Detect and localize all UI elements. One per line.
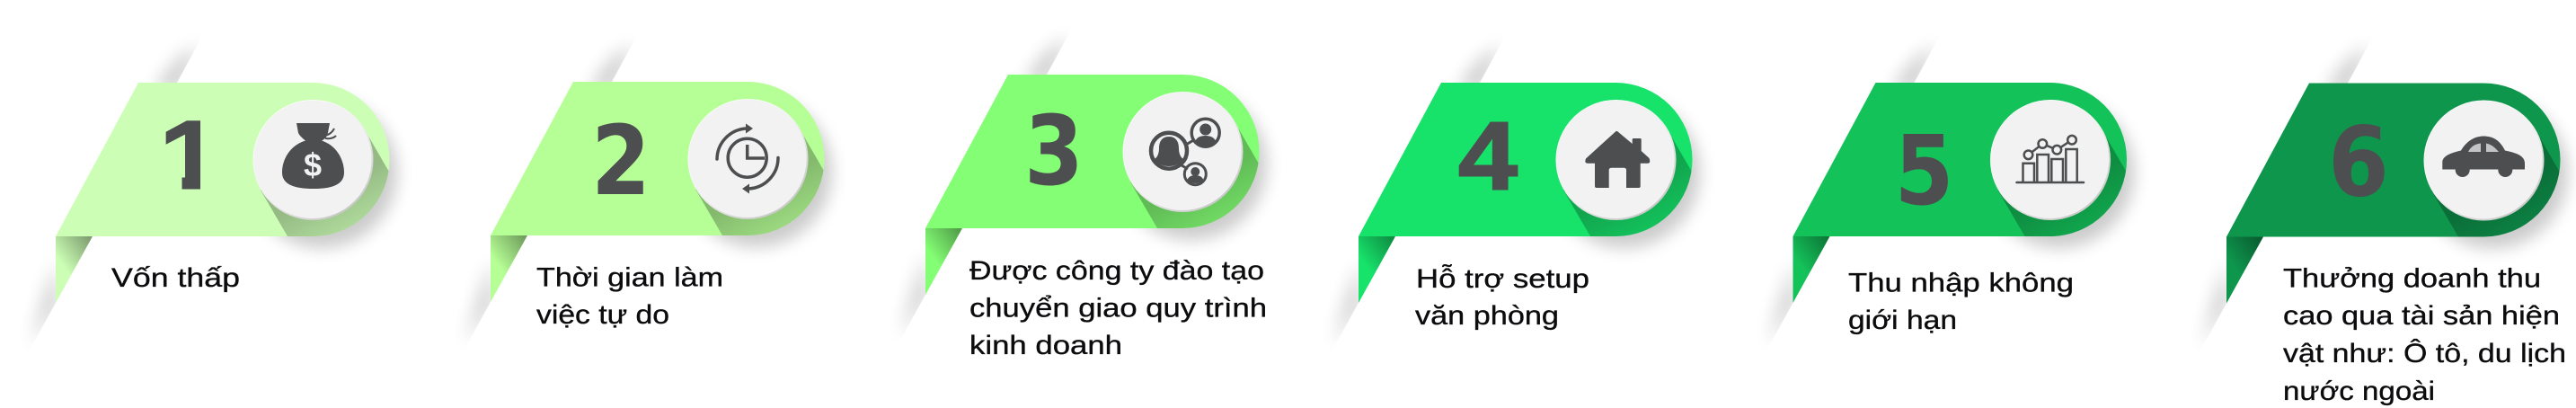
panel: card 1 (32, 45, 422, 346)
icon: clock with arrows (717, 124, 778, 194)
long shadow (1998, 136, 2126, 236)
number 6: 6 (2328, 108, 2389, 219)
long shadow (1130, 127, 1258, 228)
icon: money bag (282, 123, 344, 189)
label: kinh doanh (969, 331, 1122, 360)
bottom fold shadow (465, 270, 491, 334)
ribbon tail (2226, 237, 2263, 304)
ribbon tail (56, 236, 93, 303)
label (536, 262, 723, 330)
label (969, 256, 1267, 360)
top fold shadow (1456, 47, 1499, 83)
ribbon tail (925, 228, 962, 295)
long shadow (1563, 135, 1691, 236)
number 1: 1 (159, 101, 224, 208)
icon circle (688, 99, 809, 219)
label: việc tự do (536, 300, 669, 330)
label: Hỗ trợ setup (1416, 264, 1589, 294)
ribbon band (925, 75, 1260, 228)
ribbon band (1359, 83, 1693, 236)
ribbon band (491, 82, 825, 235)
number 5: 5 (1894, 116, 1953, 227)
number 4: 4 (1458, 101, 1518, 210)
label: chuyển giao quy trình (969, 293, 1267, 324)
label: cao qua tài sản hiện (2283, 301, 2560, 331)
long shadow (261, 135, 388, 236)
panel: card 5 (1770, 45, 2160, 346)
icon: house (1585, 131, 1650, 188)
label: văn phòng (1415, 301, 1559, 331)
top fold shadow (1890, 47, 1933, 83)
label (2283, 264, 2566, 406)
icon circle (1123, 92, 1244, 212)
ribbon tail (491, 235, 527, 302)
ribbon tail (1359, 236, 1395, 303)
bottom fold shadow (900, 262, 925, 327)
long shadow (695, 134, 823, 235)
top fold shadow (2324, 47, 2367, 83)
label (1848, 268, 2074, 335)
top fold shadow (154, 47, 196, 83)
long shadow (2431, 137, 2559, 237)
number 2: 2 (591, 106, 651, 217)
outer soft shadow (1549, 97, 1700, 248)
label (1415, 264, 1589, 331)
icon circle (1556, 100, 1677, 220)
icon circle (253, 100, 374, 220)
top fold shadow (589, 45, 631, 82)
outer soft shadow (2417, 97, 2568, 248)
ribbon band (2226, 83, 2561, 237)
bottom fold shadow (31, 271, 56, 336)
icon: car (2442, 137, 2525, 177)
bottom fold shadow (1768, 271, 1793, 336)
label: Được công ty đào tạo (969, 256, 1264, 286)
outer soft shadow (246, 97, 397, 248)
icon circle (1990, 100, 2111, 220)
label: giới hạn (1848, 306, 1957, 335)
panel: card 4 (1335, 45, 1725, 346)
bottom fold shadow (1333, 271, 1359, 336)
label: Thời gian làm (536, 262, 723, 293)
icon: network of people (1151, 119, 1219, 185)
label: Thu nhập không (1848, 268, 2074, 298)
label: Vốn thấp (111, 263, 240, 293)
icon: bar and line chart (2016, 136, 2084, 182)
panel: card 3 (902, 37, 1292, 360)
ribbon tail (1793, 236, 1829, 303)
number 3: 3 (1024, 96, 1084, 208)
outer soft shadow (1984, 97, 2135, 248)
top fold shadow (1023, 38, 1066, 75)
outer soft shadow (681, 96, 832, 247)
panel: card 6 (2203, 45, 2576, 406)
label: Thưởng doanh thu (2283, 264, 2541, 293)
outer soft shadow (1116, 89, 1267, 240)
icon: money bag: $ (304, 146, 322, 183)
panel: card 2 (467, 44, 857, 345)
label: nước ngoài (2283, 377, 2435, 406)
label: vật như: Ô tô, du lịch (2283, 338, 2566, 368)
bottom fold shadow (2201, 271, 2226, 336)
ribbon band (56, 83, 390, 236)
ribbon band (1793, 83, 2127, 236)
icon circle (2424, 101, 2545, 221)
